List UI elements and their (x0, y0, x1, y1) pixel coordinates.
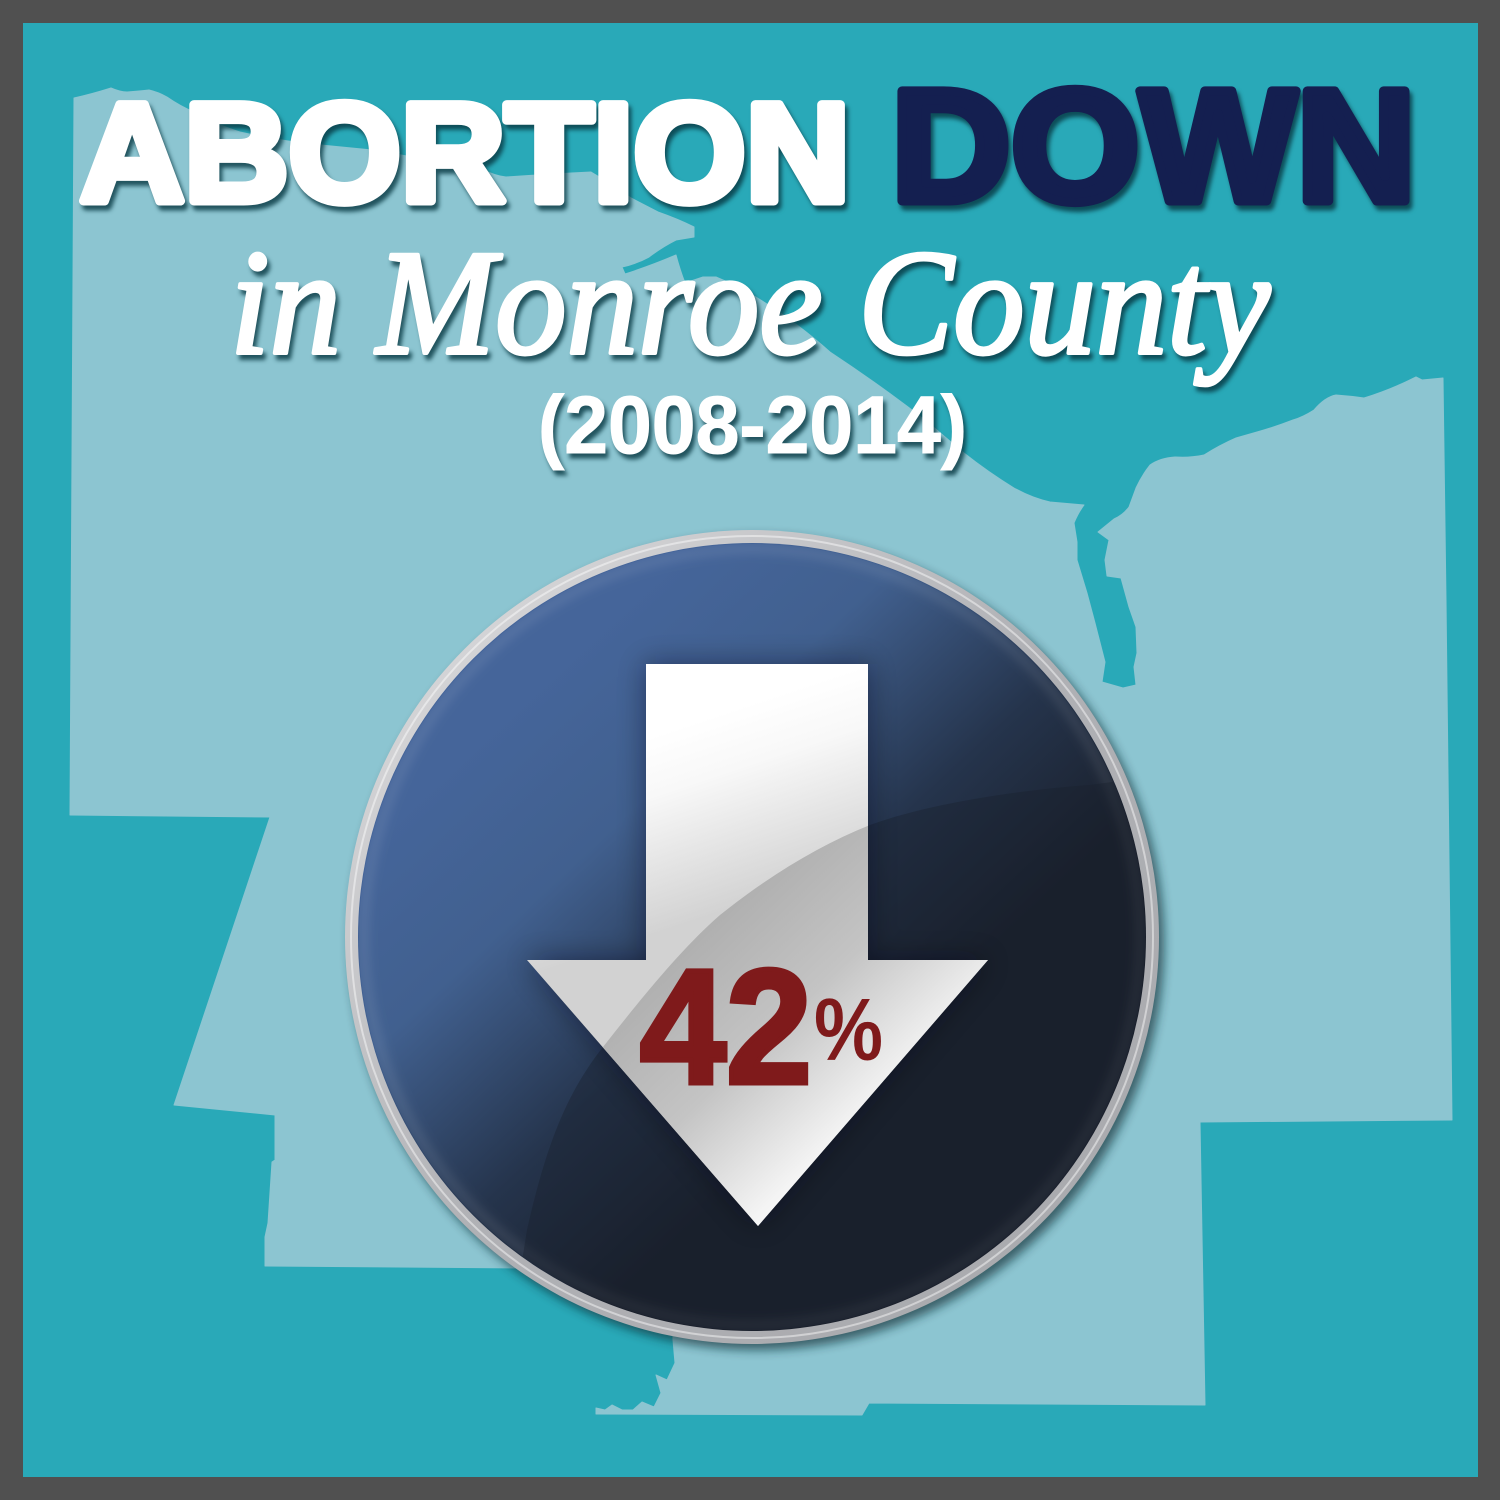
statistic: 42 percent: 42 (640, 935, 812, 1118)
gloss rim highlight (364, 549, 1140, 1325)
arrow shadow (527, 664, 988, 1226)
statistic: 42 percent: % (814, 980, 883, 1079)
title: Abortion Down: ABORTION (80, 74, 850, 231)
ring highlight (351, 536, 1153, 1338)
gloss curve overlay (523, 782, 1112, 1284)
title: Abortion Down: DOWN (891, 56, 1416, 235)
disc drop shadow (350, 536, 1164, 1350)
title: Abortion Down (80, 56, 1416, 235)
icon: down arrow (527, 664, 988, 1226)
dark blue face (358, 543, 1146, 1331)
silver ring (345, 530, 1159, 1344)
subtitle: in Monroe County: in Monroe County (230, 220, 1270, 386)
date range: (2008-2014) (538, 380, 967, 471)
disc badge (342, 528, 1172, 1358)
